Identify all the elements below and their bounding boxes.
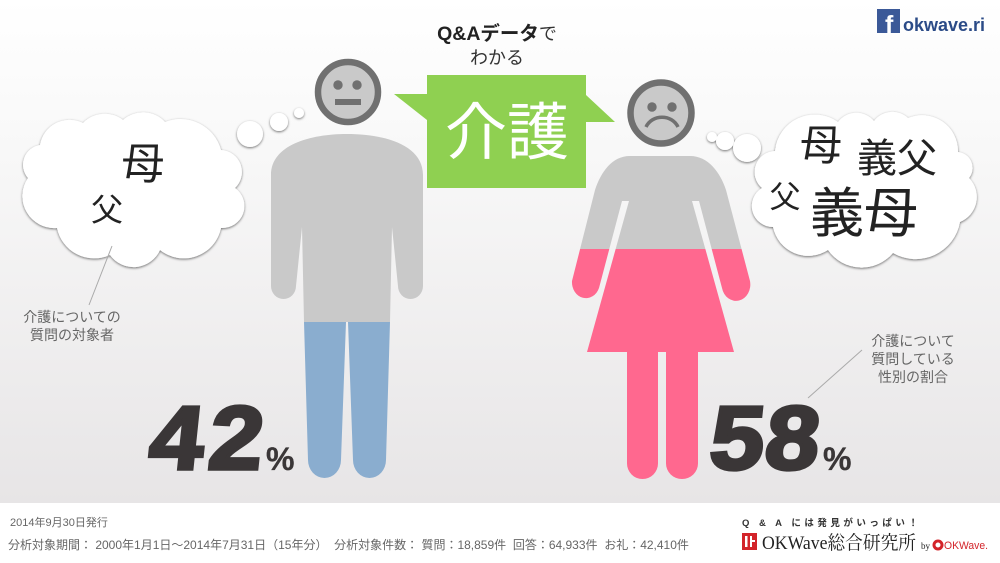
stat: 58%: 58 (705, 388, 825, 488)
label: family words right: 父 (770, 180, 800, 215)
title: わかる (470, 48, 524, 68)
callout: left caption: 質問の対象者 (30, 327, 114, 343)
callout: left caption: 介護についての (23, 309, 121, 325)
footer logo: OKWave research institute (742, 532, 988, 554)
icon: facebook logo: f (885, 11, 894, 39)
speech banner: 介護 (394, 75, 615, 188)
callout: right caption: 質問している (871, 351, 955, 367)
callout: right caption (808, 333, 955, 398)
stat: 42%: 42 (145, 388, 269, 488)
icon: facebook logo (877, 9, 900, 39)
label: family words right: 義父 (857, 137, 937, 181)
icon: woman figure (572, 156, 750, 479)
facebook handle: okwave.ri (903, 15, 985, 35)
footer panel (0, 503, 1000, 563)
label: mother, father left: 母 (122, 141, 164, 189)
title: Q&Aデータで (437, 22, 557, 45)
label: mother, father left: 父 (91, 192, 123, 228)
icon: neutral face (318, 62, 378, 122)
icon: man figure (271, 134, 423, 478)
label: family words right: 母 (800, 122, 842, 169)
callout: left caption (23, 246, 121, 343)
callout: right caption: 性別の割合 (878, 369, 948, 385)
label: family words right (770, 122, 937, 244)
title (437, 22, 557, 68)
label: family words right: 義母 (810, 184, 918, 244)
callout: right caption: 介護について (871, 333, 955, 349)
thought bubble: right (707, 112, 977, 268)
icon: sad face (630, 82, 692, 144)
footer logo: tagline: Q & A には発見がいっぱい！ (742, 517, 921, 529)
footer logo: OKWave research institute: OKWave. (944, 540, 988, 552)
stat: 58%: % (823, 441, 851, 477)
footer logo: OKWave research institute: by (921, 541, 930, 551)
speech banner: 介護: 介護 (445, 99, 569, 168)
footer: issue date: 2014年9月30日発行 (10, 515, 108, 529)
footer logo: OKWave research institute: OKWave総合研究所 (762, 532, 916, 554)
footer: analysis details: 分析対象期間： 2000年1月1日～2014年7月31日（15年分） 分析対象件数： 質問：18,859件 回答：64,933件 お礼：42,410件 (8, 537, 689, 552)
stat: 42%: % (266, 441, 294, 477)
label: mother, father left (91, 141, 164, 228)
thought bubble: left (22, 108, 304, 267)
